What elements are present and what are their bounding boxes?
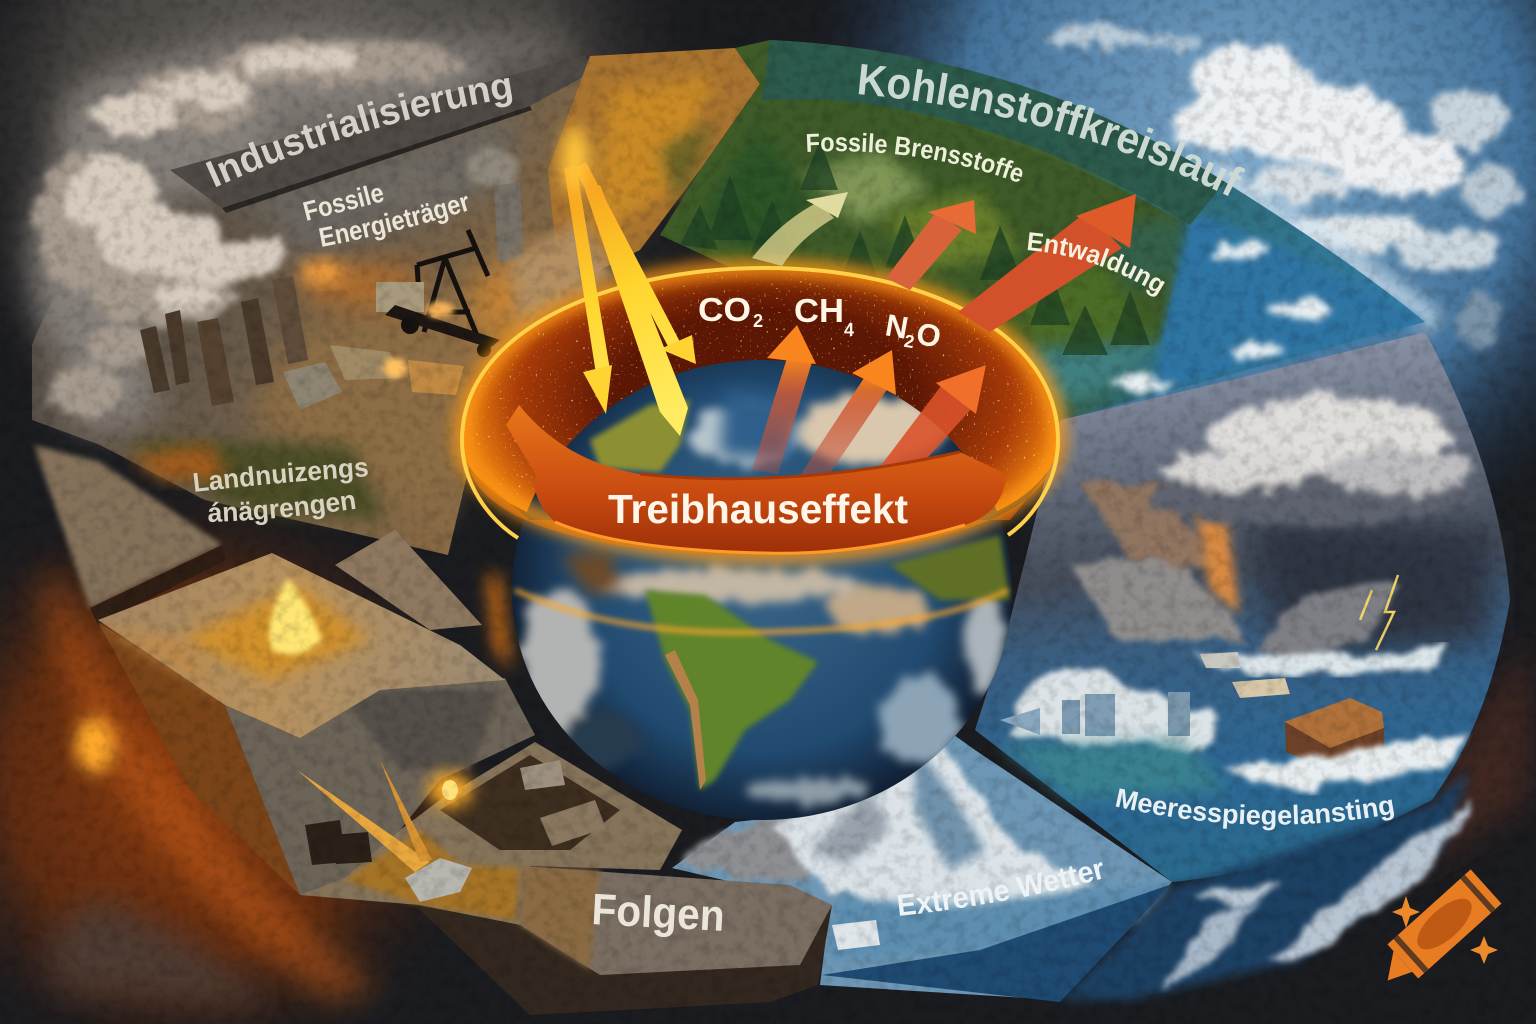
label: Fossile Brennstoffe: Fossile Brensstoffe bbox=[806, 132, 1022, 182]
greenhouse gases labels: 2 bbox=[753, 311, 763, 331]
label: Entwaldung: Entwaldung bbox=[1028, 232, 1165, 297]
greenhouse gases labels: 2 bbox=[903, 331, 916, 352]
small chunk bbox=[335, 530, 482, 630]
label: Landnuizengs ánägrengen bbox=[194, 462, 368, 525]
greenhouse ring bbox=[462, 268, 1058, 633]
lightning bbox=[1360, 575, 1398, 650]
greenhouse gases labels: O bbox=[914, 316, 944, 355]
band: Treibhauseffekt: Treibhauseffekt bbox=[608, 486, 908, 532]
label: Folgen: Folgen bbox=[590, 885, 726, 941]
panel: ice segment bbox=[672, 700, 1172, 1002]
panel: rocks left bbox=[34, 445, 832, 1015]
oil pump bbox=[417, 230, 488, 338]
greenhouse gases labels: 4 bbox=[844, 320, 854, 340]
heading: Kohlenstoffkreislauf: Kohlenstoffkreislauf bbox=[858, 64, 1246, 196]
grey cliff face bbox=[225, 678, 535, 895]
glowing ore bbox=[269, 578, 322, 654]
label: Landnuizengs ánägrengen: Landnuizengs bbox=[194, 462, 368, 492]
clouds top right bbox=[1040, 25, 1520, 350]
slab bbox=[34, 445, 222, 608]
heading plaque bbox=[762, 40, 1225, 225]
lower ring line bbox=[515, 590, 1008, 633]
ring glass back bbox=[464, 270, 1056, 512]
dark cliff under bbox=[415, 905, 832, 1015]
mining camp bbox=[297, 760, 606, 902]
block top bbox=[98, 553, 505, 738]
heading: Industrialisierung: Industrialisierung bbox=[206, 78, 512, 187]
arrows: outgoing emissions from the globe bbox=[752, 325, 986, 484]
camp ledge bbox=[300, 742, 682, 925]
storm cloud bbox=[1145, 397, 1475, 524]
globe bbox=[512, 360, 1012, 820]
factory chimneys bbox=[140, 182, 524, 410]
smoke clouds left bbox=[30, 28, 570, 430]
panel: Industrialisierung bbox=[32, 60, 590, 555]
land masses bbox=[645, 590, 818, 790]
panel: orange hillside bbox=[510, 48, 760, 330]
icon: crayon logo bbox=[1370, 869, 1501, 995]
label: Landnuizengs ánägrengen: ánägrengen bbox=[208, 494, 356, 525]
flooded house bbox=[1220, 698, 1470, 790]
flooded city bbox=[1000, 668, 1230, 800]
Folgen plaque bbox=[520, 866, 832, 975]
label: Extreme Wetter: Extreme Wetter bbox=[898, 862, 1103, 916]
greenhouse gases labels: CH bbox=[794, 292, 844, 329]
label: Fossile Energieträger: Energieträger bbox=[319, 196, 468, 247]
arrows: outgoing into atmosphere bbox=[752, 192, 1136, 332]
left wall bbox=[98, 622, 300, 895]
label: Fossile Energieträger: Fossile bbox=[303, 186, 384, 221]
greenhouse gases labels bbox=[698, 291, 944, 357]
warm ground bbox=[250, 290, 500, 520]
truck and crates bbox=[300, 260, 500, 395]
panel: Kohlenstoffkreislauf bbox=[660, 40, 1435, 420]
rays: incoming sunlight bbox=[561, 126, 696, 436]
greenhouse gases labels: CO bbox=[698, 291, 751, 328]
outer sea foam bbox=[1060, 770, 1470, 1000]
clouds on globe bbox=[520, 396, 1005, 801]
industrial plaque bbox=[170, 55, 592, 213]
side glass bbox=[470, 470, 1050, 555]
glowing outline bbox=[462, 268, 1058, 555]
trees bbox=[680, 140, 1150, 355]
greenhouse gases labels: N bbox=[883, 307, 911, 346]
band: Treibhauseffekt bbox=[506, 405, 1006, 553]
panel: Folgen storm and sea bbox=[975, 332, 1510, 882]
label: Meeresspiegelansting: Meeresspiegelansting bbox=[1116, 788, 1394, 830]
